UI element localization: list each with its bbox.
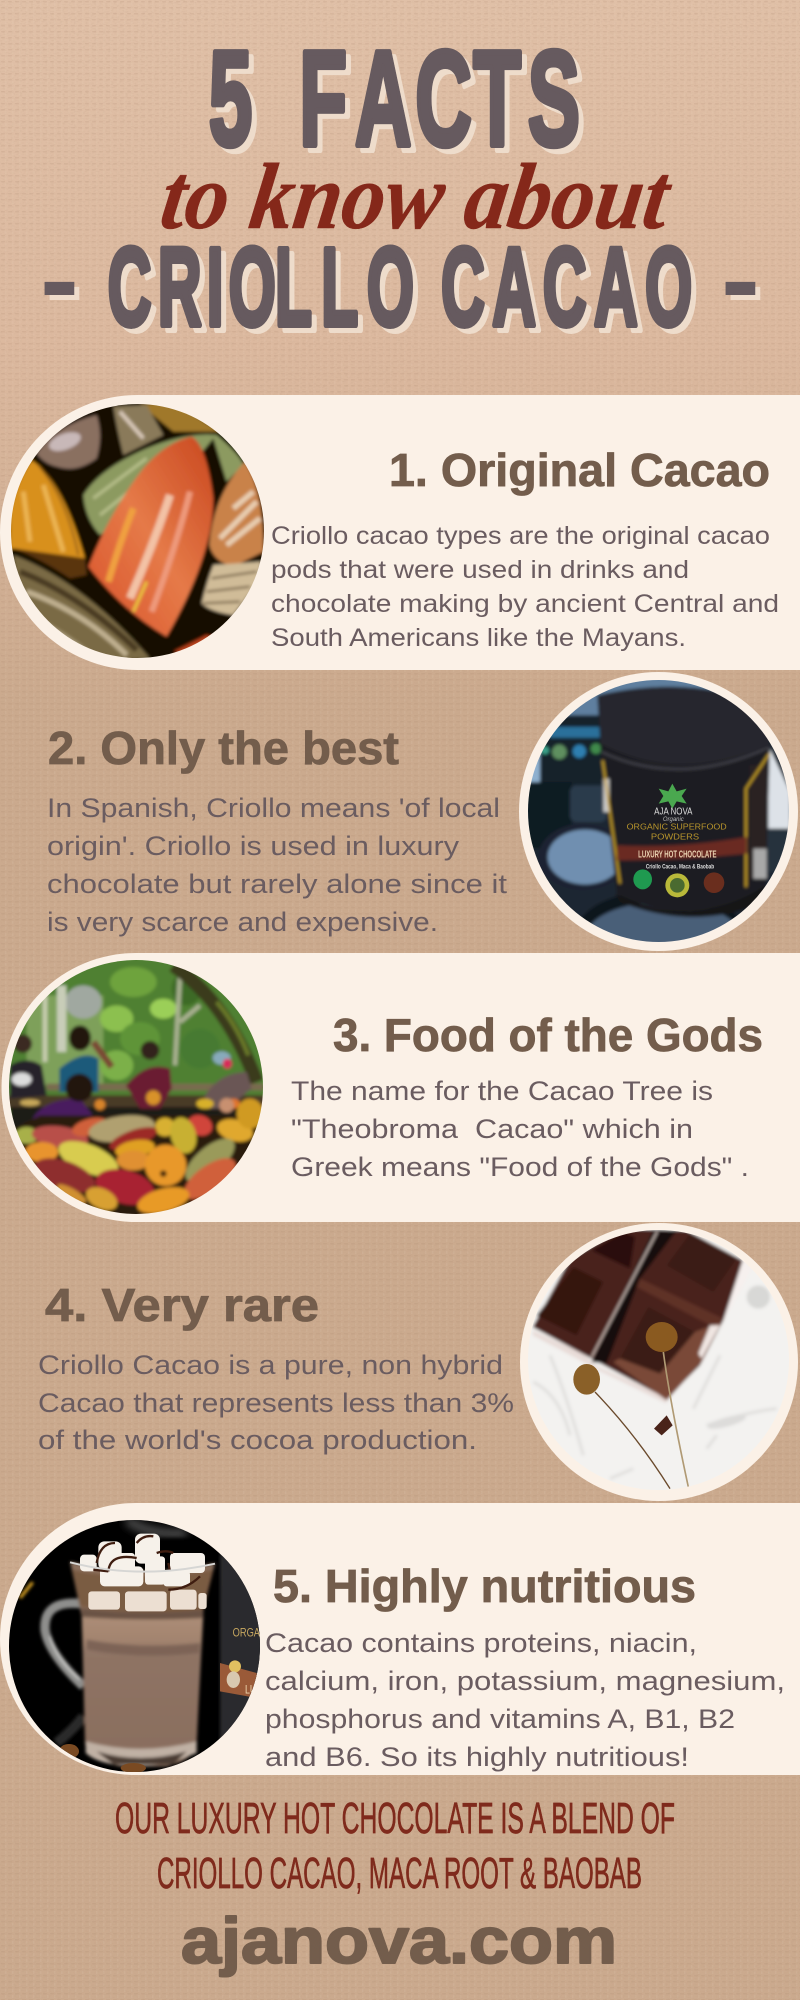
body text: chocolate making by ancient Central and xyxy=(271,590,779,618)
jar label text: Criollo Cacao, Maca & Baobab xyxy=(646,865,714,871)
footer tagline xyxy=(115,1794,675,1898)
title line: 5 FACTS: 5 FACTS xyxy=(209,24,580,174)
package label text xyxy=(233,1625,260,1697)
heading: 5. Highly nutritious xyxy=(273,1560,696,1612)
body text: South Americans like the Mayans. xyxy=(271,624,686,652)
jar label text: ORGANIC SUPERFOOD xyxy=(627,821,727,831)
panel background xyxy=(0,1503,800,1775)
panel: fact 2 xyxy=(0,672,800,1977)
jar label text: POWDERS xyxy=(651,832,699,842)
body text: pods that were used in drinks and xyxy=(271,556,689,584)
photo ring xyxy=(519,672,798,951)
marshmallows xyxy=(80,1534,205,1586)
photo: hot chocolate jar xyxy=(528,680,789,942)
heading: 2. Only the best xyxy=(48,722,399,774)
jar label text: LUXURY HOT CHOCOLATE xyxy=(638,850,717,861)
body text: of the world's cocoa production. xyxy=(38,1425,477,1455)
body text: Cacao that represents less than 3% xyxy=(38,1388,514,1418)
panel background xyxy=(0,395,800,670)
jar logo xyxy=(659,784,687,809)
website: ajanova.com xyxy=(181,1904,617,1977)
photo ring xyxy=(520,1223,798,1501)
title line: criollo cacao: CRIOLLO CACAO xyxy=(108,226,692,349)
body text xyxy=(38,1350,514,1455)
body text: Criollo cacao types are the original cacao xyxy=(271,522,770,550)
body text: Cacao contains proteins, niacin, xyxy=(265,1628,697,1658)
title line: to know about: to know about xyxy=(155,145,678,249)
title line: criollo cacao: - xyxy=(721,218,760,341)
panel background xyxy=(1,953,800,1222)
body text: In Spanish, Criollo means 'of local xyxy=(47,793,500,823)
body text: Criollo Cacao is a pure, non hybrid xyxy=(38,1350,503,1380)
heading: 3. Food of the Gods xyxy=(333,1009,763,1061)
heading: 1. Original Cacao xyxy=(389,444,770,496)
body text: and B6. So its highly nutritious! xyxy=(265,1742,689,1772)
body text: The name for the Cacao Tree is xyxy=(291,1076,713,1106)
body text xyxy=(265,1628,785,1772)
photo: cacao farmers xyxy=(9,960,263,1214)
body text: origin'. Criollo is used in luxury xyxy=(47,831,460,861)
jar label text: AJA NOVA xyxy=(654,807,693,818)
jar label text xyxy=(627,807,727,871)
title xyxy=(40,24,760,349)
package label text: ORGA xyxy=(233,1625,260,1639)
body text: is very scarce and expensive. xyxy=(47,907,438,937)
package label text: LU xyxy=(245,1683,256,1697)
body text: Greek means "Food of the Gods" . xyxy=(291,1152,749,1182)
panel: fact 5 xyxy=(0,1503,800,1783)
photo: mug of hot chocolate xyxy=(9,1520,260,1772)
heading: 4. Very rare xyxy=(45,1279,319,1331)
panel: fact 4 xyxy=(38,1222,800,1502)
body text xyxy=(271,522,779,652)
body text: chocolate but rarely alone since it xyxy=(47,869,508,899)
photo: chocolate bar on marble xyxy=(528,1230,789,1490)
title line: criollo cacao: - xyxy=(40,218,79,341)
panel: fact 3 xyxy=(0,952,800,1232)
body text: "Theobroma Cacao" which in xyxy=(291,1114,693,1144)
photo: cacao pods xyxy=(11,404,264,658)
body text: phosphorus and vitamins A, B1, B2 xyxy=(265,1704,735,1734)
body text xyxy=(47,793,508,937)
body text: calcium, iron, potassium, magnesium, xyxy=(265,1666,785,1696)
panel: fact 1 xyxy=(0,395,800,675)
jar label text: Organic xyxy=(663,817,684,823)
body text xyxy=(291,1076,749,1182)
